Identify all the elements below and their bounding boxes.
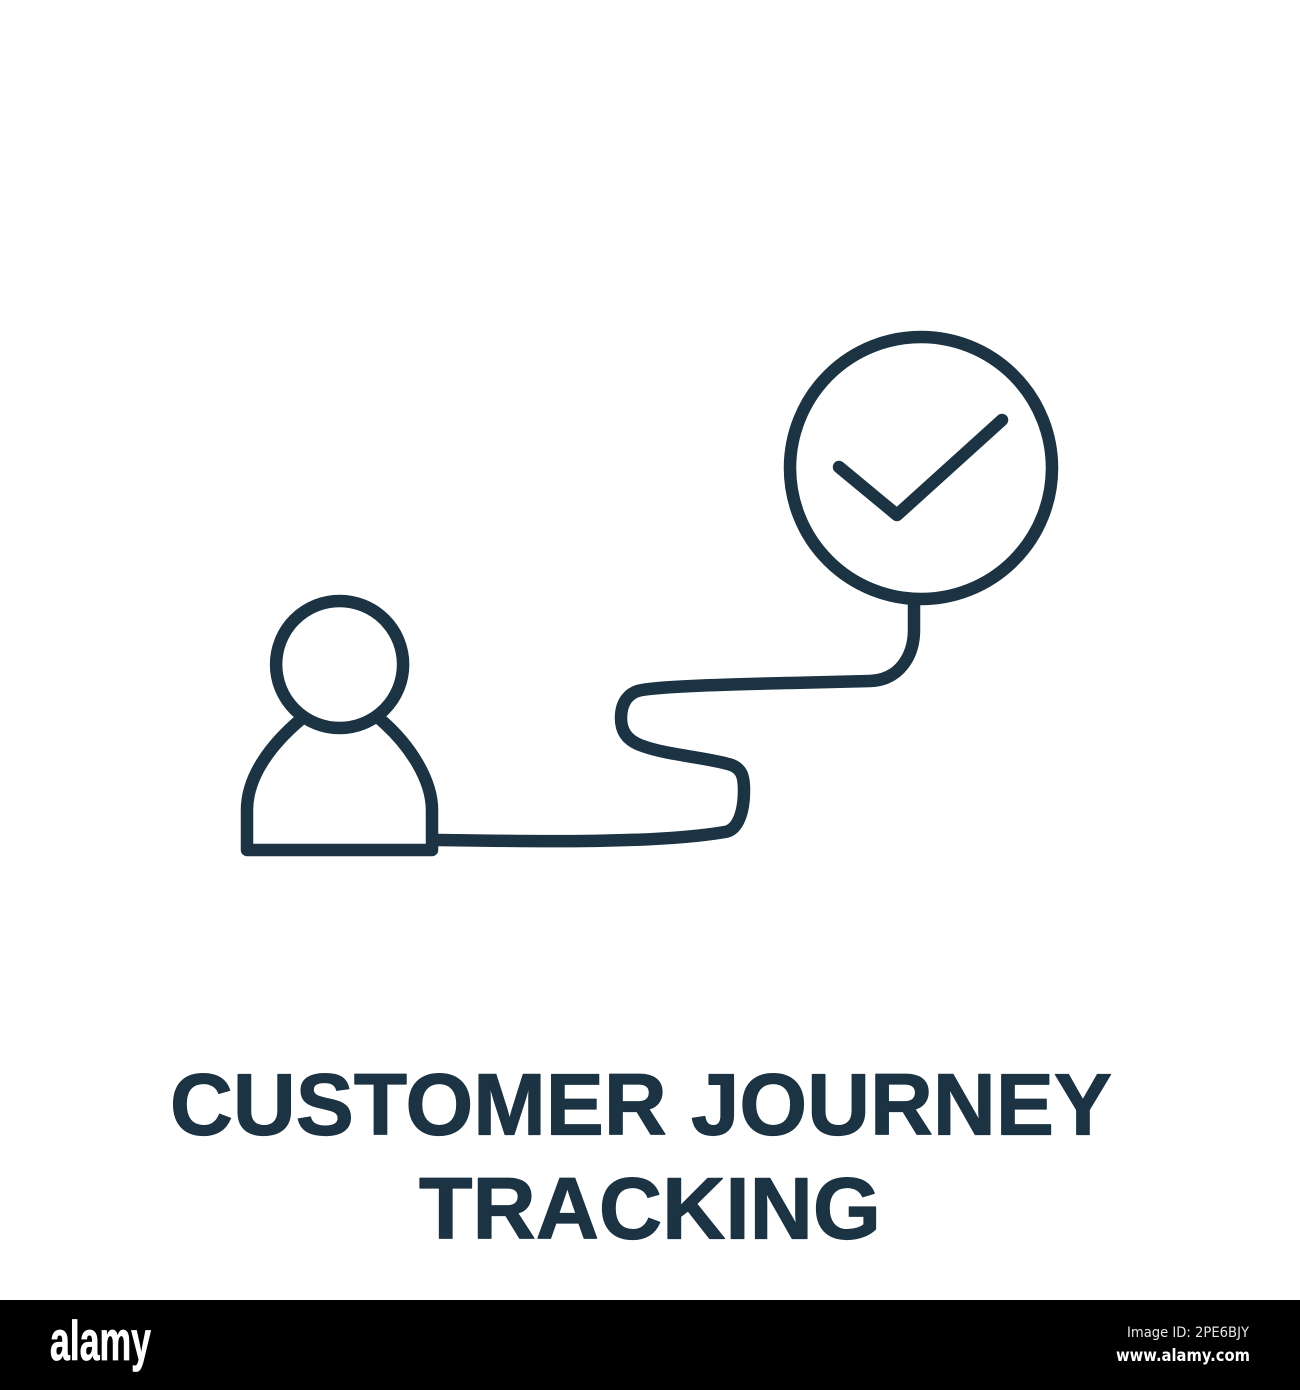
icon: customer journey tracking <box>247 337 1052 850</box>
footer bar <box>0 1300 1300 1390</box>
image id: Image ID: 2PE6BJY <box>1127 1325 1249 1341</box>
icon: check circle <box>790 337 1052 599</box>
title <box>170 1056 1112 1258</box>
title line 1: CUSTOMER JOURNEY <box>170 1056 1112 1154</box>
icon: person <box>247 601 432 850</box>
title line 2: TRACKING <box>419 1160 881 1258</box>
website: www.alamy.com <box>1116 1346 1250 1366</box>
footer logo: alamy <box>50 1309 151 1372</box>
journey path <box>438 600 914 841</box>
